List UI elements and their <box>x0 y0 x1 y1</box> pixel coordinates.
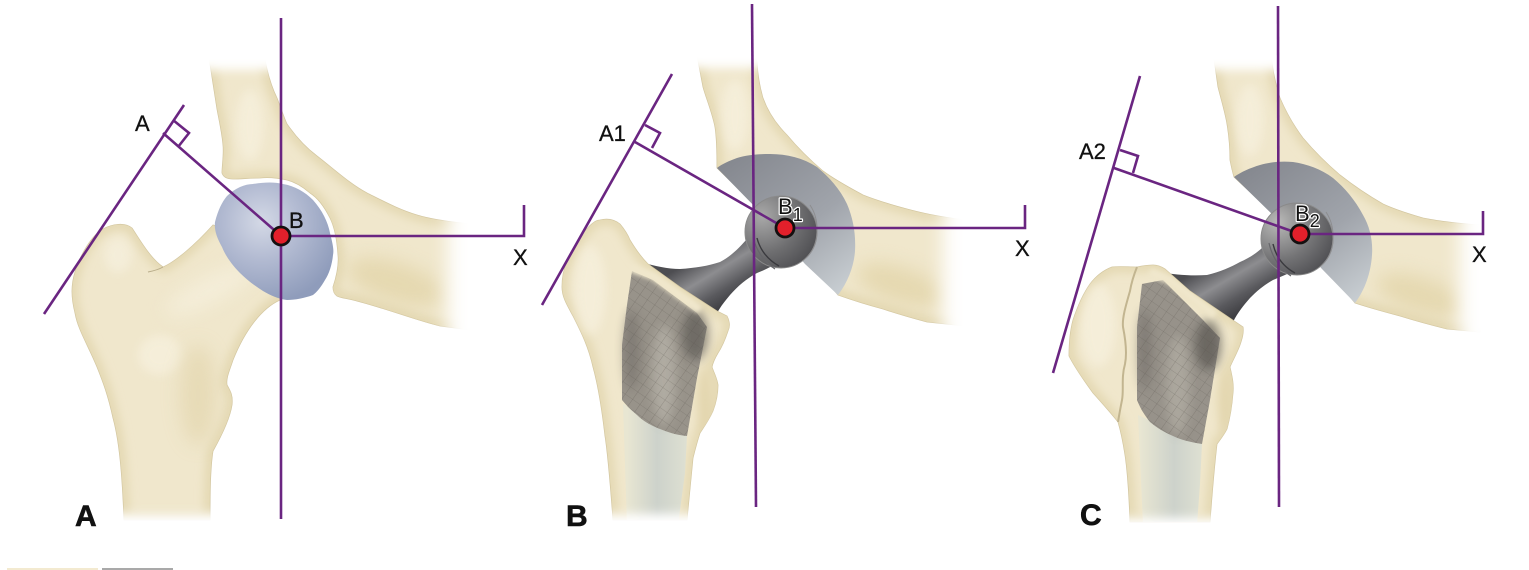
porous coated stem <box>622 268 708 436</box>
shaft canal <box>626 407 687 516</box>
label X: X <box>513 245 528 270</box>
fade overlays <box>595 20 1003 554</box>
panel letter C: C <box>1080 499 1102 532</box>
label A2: A2 <box>1079 139 1106 164</box>
centre point B1 <box>776 219 794 237</box>
axis lines C <box>1053 6 1483 507</box>
fade overlays <box>100 20 508 554</box>
cropped image remnants at bottom edge <box>7 568 173 570</box>
femur bone <box>72 224 290 520</box>
prosthetic head <box>1261 203 1333 276</box>
panel letter A: A <box>75 500 97 533</box>
label B: B <box>289 208 304 233</box>
label B1: B <box>778 194 793 219</box>
pelvis bone <box>210 64 460 329</box>
pelvis bone <box>698 62 954 325</box>
fade overlays <box>1115 20 1520 558</box>
shaft canal <box>1138 415 1202 525</box>
panel A: native hip joint <box>44 18 528 554</box>
axis lines A <box>44 18 524 519</box>
femur with stem <box>1069 265 1243 525</box>
panel C: reconstruction with increased offset <box>1052 6 1486 526</box>
panel letter B: B <box>566 500 588 533</box>
label A: A <box>135 111 150 136</box>
acetabular cup <box>717 154 855 295</box>
femoral head <box>215 182 333 300</box>
acetabular cup <box>1234 162 1372 303</box>
label B2: 2 <box>1310 211 1320 231</box>
label X: X <box>1472 242 1487 267</box>
panel B: reconstruction with medialized cup <box>542 4 1030 554</box>
femoral neck <box>1160 247 1295 322</box>
label A1: A1 <box>599 121 626 146</box>
label B1: 1 <box>793 205 803 225</box>
femoral neck <box>640 233 780 313</box>
centre point B2 <box>1291 225 1309 243</box>
femur with stem <box>562 219 729 525</box>
porous coated stem <box>1137 272 1221 444</box>
axis lines B <box>542 4 1025 507</box>
label X: X <box>1015 236 1030 261</box>
centre point B <box>272 227 290 245</box>
pelvis bone <box>1214 64 1472 332</box>
prosthetic head <box>745 196 817 269</box>
label B2: B <box>1295 201 1310 226</box>
osteotomy line <box>1118 267 1137 422</box>
